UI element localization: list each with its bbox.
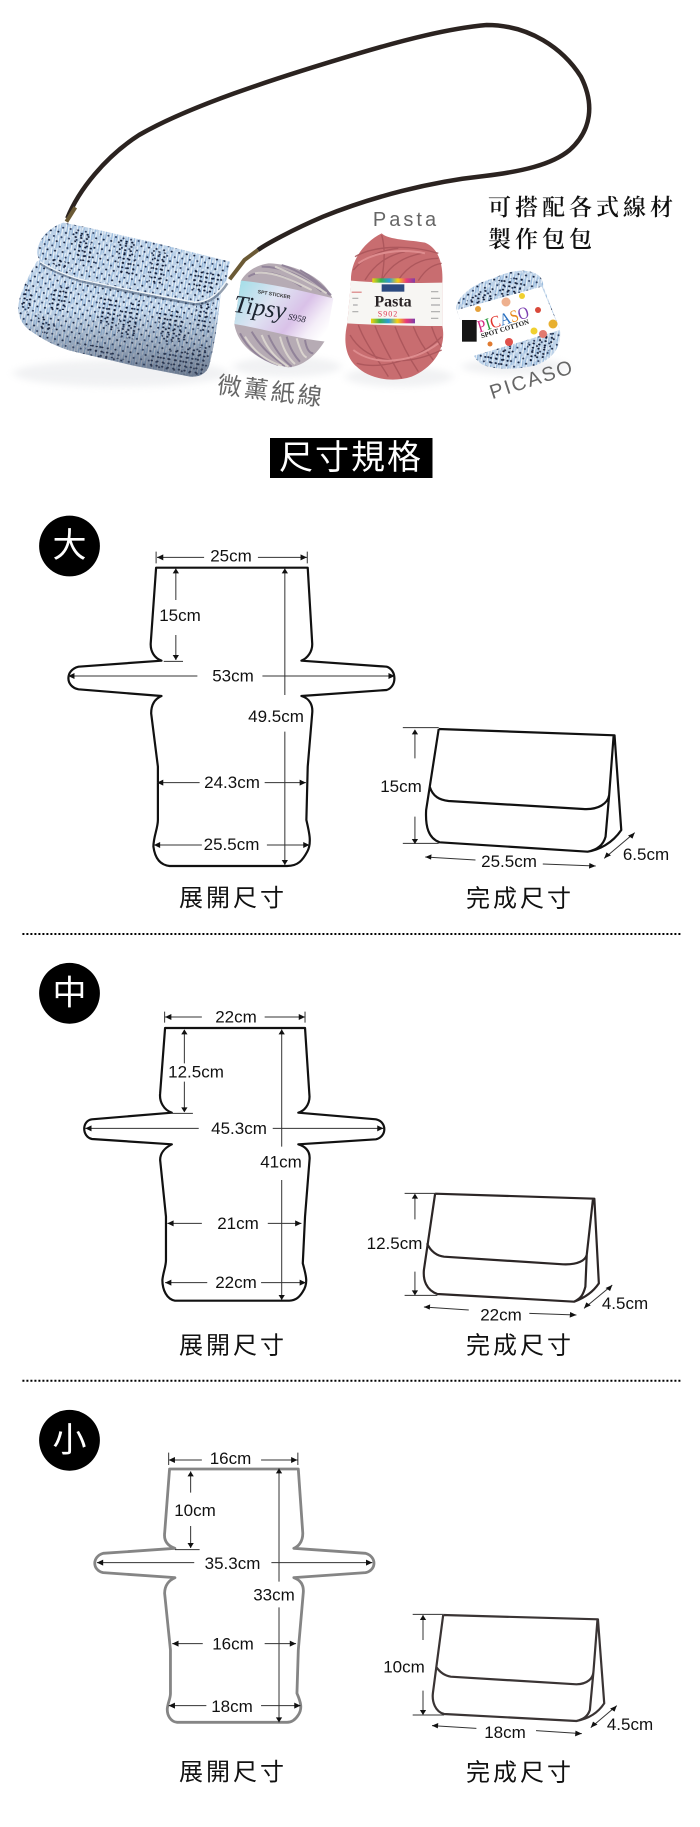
flat pattern: medium: 21cm [217, 1214, 259, 1233]
product photo: bag, strap and yarns [13, 25, 677, 412]
finished bag: medium: 12.5cm [367, 1234, 422, 1253]
finished bag: medium [367, 1193, 648, 1324]
flat pattern: small: 33cm [253, 1586, 295, 1604]
Pasta yarn [345, 233, 443, 380]
badge: 小: 小 [52, 1421, 86, 1459]
flat pattern: small: 18cm [211, 1697, 253, 1716]
Tipsy yarn: Tipsy [232, 291, 289, 325]
label: 微薰紙線: 微薰紙線 [216, 372, 326, 412]
heading: 尺寸規格: 尺寸規格 [279, 439, 423, 477]
PICASO yarn [456, 271, 560, 369]
finished bag: small: 4.5cm [607, 1715, 653, 1734]
section: small [39, 1410, 653, 1786]
caption: yarn note: 可搭配各式線材 [488, 195, 677, 220]
Tipsy yarn [232, 263, 333, 367]
bag body [18, 243, 221, 377]
finished bag: medium: 4.5cm [602, 1294, 648, 1313]
section: large [39, 516, 669, 912]
Tipsy yarn: SPT STICKER [257, 289, 291, 301]
finished bag: large [380, 728, 669, 871]
bag flap [37, 223, 230, 302]
flat pattern: small [95, 1449, 374, 1722]
flat pattern: large [68, 546, 395, 866]
badge: 大 [39, 516, 100, 576]
patterned bag [18, 223, 230, 377]
flat pattern: large: 53cm [212, 666, 254, 686]
flat pattern: small: 16cm [210, 1449, 251, 1468]
caption: unfolded size: 展開尺寸 [179, 1332, 287, 1360]
flat pattern: small: 10cm [174, 1501, 216, 1520]
finished bag: medium: 22cm [480, 1306, 522, 1324]
finished bag: small: 10cm [383, 1658, 425, 1676]
badge: 中: 中 [52, 974, 86, 1012]
flat pattern: medium: 12.5cm [168, 1062, 224, 1082]
flat pattern: large: 25.5cm [204, 835, 259, 854]
section: medium [39, 963, 648, 1360]
flat pattern: large: 25cm [210, 546, 252, 566]
flat pattern: medium: 41cm [260, 1152, 302, 1172]
shoulder strap [66, 25, 589, 279]
flat pattern: large: 49.5cm [248, 707, 304, 726]
caption: yarn note [488, 195, 677, 252]
caption: unfolded size: 展開尺寸 [179, 885, 287, 912]
PICASO yarn: PICASO [475, 302, 531, 336]
badge: 中 [39, 963, 100, 1024]
flat pattern: large: 24.3cm [204, 773, 260, 792]
Tipsy yarn: S958 [287, 312, 307, 325]
finished bag: large: 25.5cm [481, 852, 537, 871]
caption: finished size: 完成尺寸 [466, 886, 574, 912]
flat pattern: medium: 22cm [215, 1273, 257, 1292]
label: PICASO: PICASO [487, 356, 577, 404]
PICASO yarn: SPOT COTTON [480, 318, 530, 340]
flat pattern: large: 15cm [159, 606, 201, 625]
finished bag: large: 15cm [380, 777, 422, 796]
Pasta yarn: Pasta [374, 294, 412, 310]
caption: finished size: 完成尺寸 [466, 1760, 574, 1786]
badge: 大: 大 [52, 527, 86, 565]
finished bag: large: 6.5cm [623, 845, 669, 864]
Pasta yarn: S902 [378, 310, 398, 318]
flat pattern: medium: 22cm [215, 1008, 257, 1026]
badge: 小 [39, 1410, 100, 1471]
flap shadow [40, 263, 227, 304]
flat pattern: medium: 45.3cm [211, 1119, 267, 1138]
flat pattern: small: 35.3cm [205, 1554, 260, 1573]
caption: finished size: 完成尺寸 [466, 1332, 574, 1360]
caption: yarn note: 製作包包 [488, 227, 596, 252]
flat pattern: medium [84, 1008, 384, 1301]
label: Pasta: Pasta [373, 209, 439, 231]
soft shadows [13, 357, 570, 387]
finished bag: small: 18cm [484, 1723, 526, 1742]
caption: unfolded size: 展開尺寸 [179, 1759, 287, 1786]
flat pattern: small: 16cm [212, 1634, 254, 1654]
finished bag: small [383, 1614, 653, 1742]
